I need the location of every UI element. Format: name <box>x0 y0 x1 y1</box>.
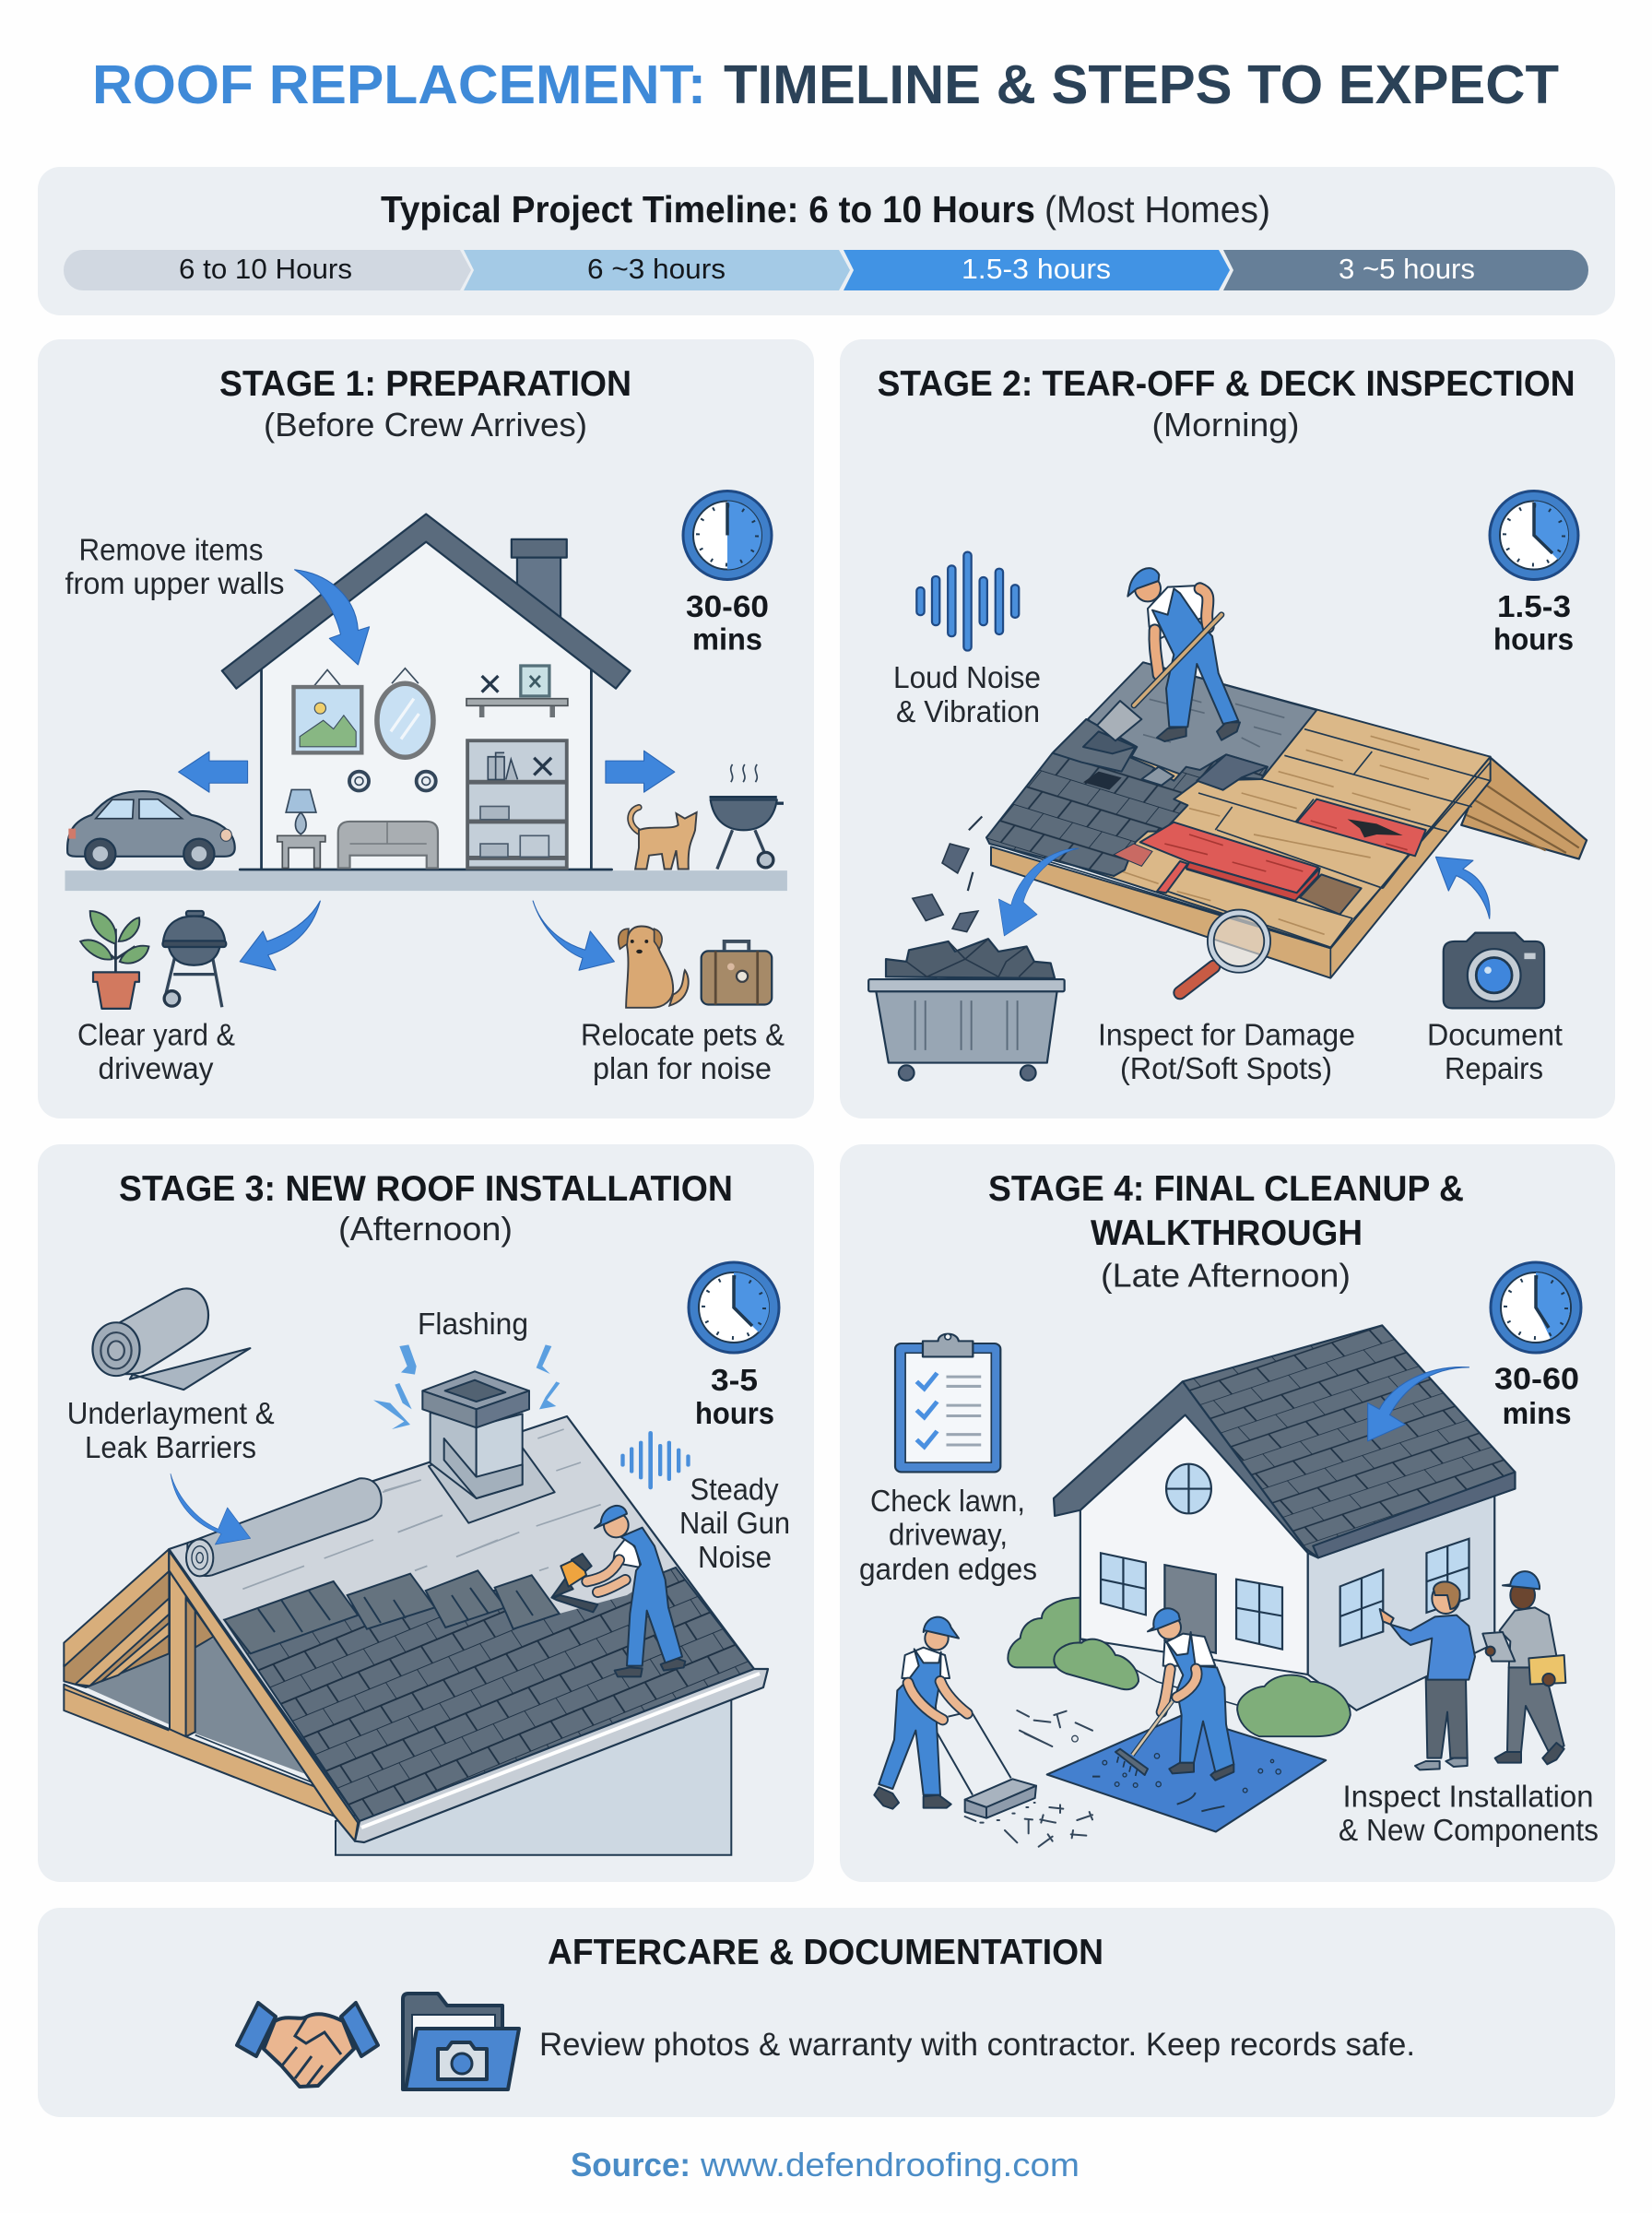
title <box>92 54 1559 115</box>
callout: loud noise <box>893 660 1041 728</box>
callout: check lawn: Check lawn, <box>870 1484 1025 1518</box>
clock: 1.5-3 hours <box>1490 491 1578 579</box>
house <box>222 514 631 870</box>
wall decor <box>293 666 568 790</box>
source line: www.defendroofing.com <box>700 2146 1080 2183</box>
callout: clear yard <box>77 1018 235 1085</box>
duration label: 30-60 mins: mins <box>1503 1396 1572 1430</box>
callout: check lawn: driveway, <box>889 1518 1008 1551</box>
wood truss <box>64 1549 335 1817</box>
stage 4 house illustration <box>895 1325 1515 1831</box>
scattered debris <box>965 1710 1092 1847</box>
timeline bar: 3 to 5 hours: 3 ~5 hours <box>1339 253 1475 285</box>
duration label: 3-5 hours: 3-5 <box>711 1363 758 1397</box>
panel: stage 3 installation <box>38 1144 814 1882</box>
icon: sound wave <box>916 552 1019 651</box>
house wall <box>336 1699 731 1855</box>
aftercare heading: AFTERCARE & DOCUMENTATION <box>548 1933 1103 1972</box>
arrow to upper walls <box>295 570 370 665</box>
duration label: 1.5-3 hours <box>1493 589 1574 657</box>
falling debris <box>913 816 982 932</box>
callout: inspect installation: & New Components <box>1339 1813 1599 1847</box>
stage 2 roof deck scene <box>986 568 1491 993</box>
icon: camera <box>1444 933 1544 1008</box>
callout: underlayment: Leak Barriers <box>85 1430 256 1464</box>
stage 1 heading <box>219 364 631 444</box>
callout: relocate pets <box>581 1018 785 1085</box>
underlayment roof plane <box>169 1416 754 1821</box>
callout: inspect for damage <box>1098 1018 1355 1085</box>
shingles <box>986 719 1268 876</box>
stage 3 heading: (Afternoon) <box>338 1210 513 1248</box>
chimney and worker scene <box>373 1344 690 1676</box>
front bush <box>1237 1675 1351 1736</box>
stage 1 illustration <box>65 514 787 1009</box>
icon: suitcase <box>702 941 772 1005</box>
panel: project timeline <box>38 167 1615 315</box>
stage 3 heading <box>119 1169 733 1248</box>
callout: underlayment <box>67 1396 275 1464</box>
arrow to pets <box>533 901 614 970</box>
house walls <box>1080 1413 1494 1710</box>
arrow to roof <box>1368 1367 1469 1441</box>
arrow left <box>179 751 248 792</box>
arrow to underlayment <box>171 1473 251 1544</box>
inspectors scene <box>1380 1571 1565 1769</box>
icon: cat <box>631 808 697 870</box>
icon: handshake <box>237 2003 378 2087</box>
icon: magnifying glass <box>1180 913 1268 993</box>
callout: remove items: Remove items <box>79 533 264 566</box>
timeline bar: 6 to 10 hours <box>64 250 471 290</box>
callout: remove items <box>65 533 284 600</box>
duration label: 30-60 mins: 30-60 <box>1494 1362 1579 1396</box>
large starter shingles <box>224 1570 560 1653</box>
rolled felt on roof <box>171 1473 382 1576</box>
living room furniture <box>277 789 438 868</box>
felt seams right <box>384 1429 601 1570</box>
panel: stage 1 preparation <box>38 339 814 1118</box>
callout: inspect installation: Inspect Installation <box>1342 1780 1593 1814</box>
underlayment <box>1088 662 1316 781</box>
callout: flashing: Flashing <box>418 1307 528 1341</box>
bushes by door <box>1008 1598 1139 1689</box>
callout: inspect for damage: (Rot/Soft Spots) <box>1120 1051 1332 1085</box>
inspector in blue <box>1380 1581 1475 1769</box>
panel: aftercare and documentation <box>38 1908 1615 2117</box>
stage 2 heading: STAGE 2: TEAR-OFF & DECK INSPECTION <box>878 364 1575 404</box>
timeline bar: 1.5 to 3 hours: 1.5-3 hours <box>962 253 1111 285</box>
callout: relocate pets: plan for noise <box>593 1051 772 1085</box>
torn shingle pieces <box>1053 719 1268 790</box>
source line <box>571 2146 1080 2183</box>
timeline bar: 1.5 to 3 hours <box>844 250 1230 290</box>
bookshelf <box>467 740 567 868</box>
callout: document repairs: Repairs <box>1445 1051 1543 1085</box>
icon: dog <box>619 926 689 1008</box>
stage 4 heading: WALKTHROUGH <box>1091 1213 1363 1253</box>
icon: grill right <box>710 764 784 870</box>
timeline bar: 6 to 3 hours: 6 ~3 hours <box>587 253 726 285</box>
felt seam lines <box>242 1480 498 1589</box>
callout: check lawn <box>859 1484 1037 1586</box>
timeline heading: Typical Project Timeline: 6 to 10 Hours <box>381 188 1035 231</box>
house windows <box>1101 1464 1469 1650</box>
worker with shovel <box>1097 568 1240 741</box>
arrow to yard <box>240 901 320 970</box>
rotten boards <box>1114 799 1426 915</box>
flashing marks <box>373 1344 560 1429</box>
chimney with flashing <box>422 1371 555 1523</box>
stage 1 heading: STAGE 1: PREPARATION <box>219 364 631 404</box>
clock: 30-60 mins <box>1491 1262 1581 1353</box>
roof edge board <box>169 1551 358 1841</box>
clock: 30-60 mins <box>683 491 772 579</box>
callout: underlayment: Underlayment & <box>67 1396 275 1430</box>
timeline heading: (Most Homes) <box>1044 188 1270 231</box>
worker with nail gun <box>587 1506 685 1676</box>
stage 2 heading <box>878 364 1575 444</box>
stage 2 heading: (Morning) <box>1152 406 1300 444</box>
duration label: 3-5 hours <box>695 1363 774 1430</box>
callout: nail gun noise: Noise <box>698 1540 772 1574</box>
arrow right <box>606 751 675 792</box>
duration label: 30-60 mins <box>686 589 769 657</box>
duration label: 1.5-3 hours: 1.5-3 <box>1497 589 1571 623</box>
shingle field <box>224 1568 754 1821</box>
icon: car <box>67 791 235 870</box>
panel: stage 2 tear-off <box>840 339 1615 1118</box>
callout: document repairs <box>1427 1018 1563 1085</box>
callout: check lawn: garden edges <box>859 1552 1037 1586</box>
stage 4 heading: (Late Afternoon) <box>1101 1256 1351 1295</box>
door <box>1164 1565 1216 1653</box>
panel: stage 4 cleanup <box>840 1144 1615 1882</box>
ground strip <box>65 870 787 891</box>
dumpster <box>868 939 1065 1081</box>
callout: clear yard: driveway <box>98 1051 214 1085</box>
callout: clear yard: Clear yard & <box>77 1018 235 1051</box>
arrow to repairs <box>1435 857 1490 918</box>
eave gutter <box>355 1669 768 1842</box>
icon: underlayment roll <box>92 1288 250 1390</box>
icon: potted plant <box>80 911 148 1009</box>
duration label: 3-5 hours: hours <box>695 1396 774 1430</box>
stage 4 heading: STAGE 4: FINAL CLEANUP & <box>988 1169 1464 1209</box>
worker with rake <box>1115 1608 1233 1781</box>
callout: nail gun noise: Nail Gun <box>679 1506 790 1540</box>
duration label: 30-60 mins <box>1494 1362 1579 1430</box>
underlayment seam lines <box>1143 694 1284 747</box>
clock: 3-5 hours <box>689 1262 779 1353</box>
stage 4 heading <box>988 1169 1464 1295</box>
timeline bar: 3 to 5 hours <box>1223 250 1588 290</box>
title: ROOF REPLACEMENT: <box>92 54 706 115</box>
roof deck <box>986 662 1491 978</box>
callout: inspect for damage: Inspect for Damage <box>1098 1018 1355 1051</box>
callout: inspect installation <box>1339 1780 1599 1847</box>
stage 2 icons and dumpster <box>868 552 1587 1081</box>
icon: nail gun sound <box>620 1431 690 1489</box>
aftercare description: Review photos & warranty with contractor. Keep records safe. <box>539 2027 1415 2063</box>
nail gun <box>551 1554 597 1612</box>
callout: nail gun noise <box>679 1472 790 1574</box>
tarp debris <box>1092 1777 1224 1811</box>
icon: folder with camera <box>403 1994 519 2089</box>
callout: loud noise: & Vibration <box>896 694 1040 728</box>
callout: nail gun noise: Steady <box>690 1472 779 1507</box>
callout: document repairs: Document <box>1427 1018 1563 1051</box>
timeline bar: 6 to 3 hours <box>464 250 850 290</box>
timeline bar: 6 to 10 hours: 6 to 10 Hours <box>179 253 352 285</box>
icon: clipboard <box>895 1334 1000 1472</box>
cleanup workers scene <box>874 1598 1280 1847</box>
shingled roof <box>1054 1325 1515 1557</box>
inspector with tablet <box>1482 1571 1565 1764</box>
callout: remove items: from upper walls <box>65 566 284 600</box>
worker with magnet sweeper <box>874 1617 1036 1818</box>
felt above shingles <box>224 1531 664 1620</box>
arrow to dumpster <box>998 848 1079 936</box>
tarp <box>1047 1715 1326 1831</box>
roof gable end <box>1461 757 1587 859</box>
icon: grill left <box>162 911 226 1007</box>
source line: Source: <box>571 2146 690 2183</box>
duration label: 30-60 mins: 30-60 <box>686 589 769 623</box>
duration label: 1.5-3 hours: hours <box>1493 621 1574 657</box>
callout: loud noise: Loud Noise <box>893 660 1041 694</box>
duration label: 30-60 mins: mins <box>692 621 762 657</box>
stage 1 heading: (Before Crew Arrives) <box>264 406 587 444</box>
stage 3 heading: STAGE 3: NEW ROOF INSTALLATION <box>119 1169 733 1209</box>
callout: relocate pets: Relocate pets & <box>581 1018 785 1051</box>
title: TIMELINE & STEPS TO EXPECT <box>724 54 1559 115</box>
